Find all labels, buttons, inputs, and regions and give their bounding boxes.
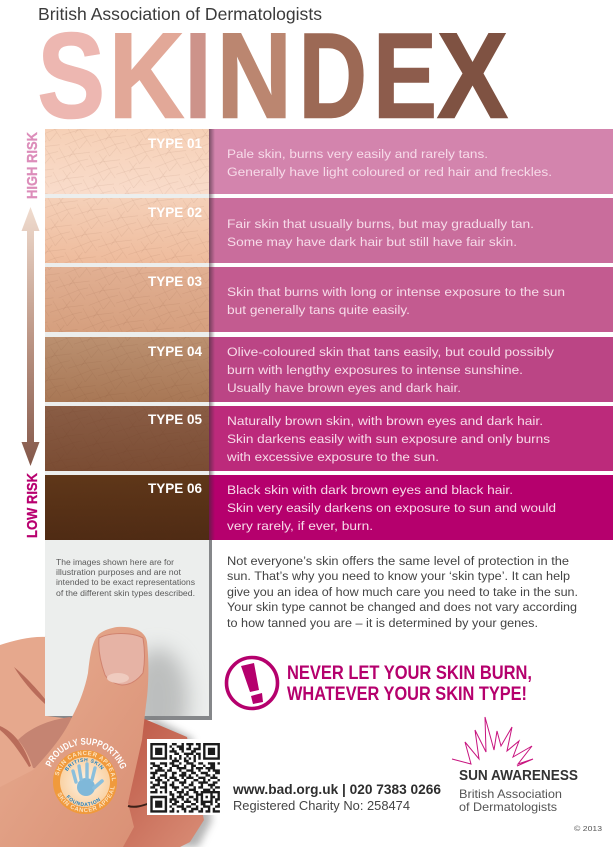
row: type 06: TYPE 06 — [148, 480, 202, 496]
card edge shadow — [209, 129, 215, 540]
badge: skin cancer appeal — [45, 738, 126, 814]
icon: blue handprint — [73, 764, 102, 796]
hand shadow — [150, 716, 212, 847]
logo: sun awareness: British Association — [459, 787, 562, 801]
crease between fingers — [128, 803, 150, 807]
row: type 04: Olive-coloured skin that tans easily, but could possibly — [227, 345, 555, 359]
explanatory paragraph — [227, 554, 578, 630]
QR code — [147, 739, 222, 815]
row: type 04: burn with lengthy exposures to intense sunshine. — [227, 363, 523, 377]
row: type 04: TYPE 04 — [148, 343, 202, 359]
logo: sun awareness — [452, 717, 578, 814]
explanatory paragraph: give you an idea of how much care you need to take in the sun. — [227, 585, 578, 599]
warning message: NEVER LET YOUR SKIN BURN, — [287, 663, 532, 684]
icon: exclamation warning — [226, 658, 278, 708]
row: type 01: TYPE 01 — [148, 135, 202, 151]
icon: sun rays — [452, 717, 533, 766]
badge: skin cancer appeal: FOUNDATION — [66, 794, 100, 806]
risk scale arrow — [22, 207, 40, 466]
title: SKINDEX — [38, 7, 508, 143]
row: type 05: Naturally brown skin, with brown eyes and dark hair. — [227, 414, 543, 428]
explanatory paragraph: sun. That’s why you need to know your ‘skin type’. It can help — [227, 569, 570, 583]
finger creases — [0, 667, 45, 767]
row: type 03: but generally tans quite easily. — [227, 303, 410, 317]
explanatory paragraph: to how tanned you are – it is determined by your genes. — [227, 616, 538, 630]
row: type 06: Black skin with dark brown eyes and black hair. — [227, 483, 513, 497]
high risk label: HIGH RISK — [24, 132, 41, 199]
contact details: Registered Charity No: 258474 — [233, 799, 410, 813]
title: SKINDEX: K — [109, 7, 184, 143]
lower finger — [18, 717, 85, 770]
row: type 03: TYPE 03 — [148, 273, 202, 289]
badge: skin cancer appeal: BRITISH SKIN — [64, 758, 104, 772]
row: type 06: Skin very easily darkens on exposure to sun and would — [227, 501, 556, 515]
title: SKINDEX: E — [373, 7, 437, 143]
thumb shadow on card — [144, 641, 196, 716]
warning message: WHATEVER YOUR SKIN TYPE! — [287, 684, 527, 705]
title: SKINDEX: N — [216, 7, 292, 143]
illustration disclaimer note — [56, 558, 195, 598]
title: SKINDEX: D — [298, 7, 367, 143]
held card — [45, 129, 212, 720]
back fingers — [100, 717, 204, 847]
row: type 04 — [45, 337, 613, 402]
row: type 02: Fair skin that usually burns, but may gradually tan. — [227, 217, 534, 231]
row: type 05: with excessive exposure to the sun. — [226, 450, 439, 464]
illustration disclaimer note: of the different skin types described. — [56, 589, 195, 598]
explanatory paragraph: Your skin type cannot be changed and does not vary according — [227, 600, 577, 614]
row: type 05: TYPE 05 — [148, 411, 202, 427]
row: type 05 — [45, 406, 613, 471]
title: SKINDEX: I — [184, 7, 212, 143]
contact details: www.bad.org.uk | 020 7383 0266 — [232, 781, 441, 797]
row: type 03 — [45, 267, 613, 332]
row: type 01 — [45, 129, 613, 194]
badge: skin cancer appeal: PROUDLY SUPPORTING — [45, 738, 126, 769]
low risk label: LOW RISK — [24, 473, 41, 538]
nail lunula — [107, 673, 129, 683]
thumbnail — [99, 634, 144, 685]
row: type 01: Generally have light coloured or red hair and freckles. — [227, 165, 552, 179]
logo: sun awareness: SUN AWARENESS — [459, 768, 578, 784]
row: type 02: Some may have dark hair but still have fair skin. — [227, 235, 517, 249]
left fingers — [0, 637, 80, 847]
explanatory paragraph: Not everyone’s skin offers the same level of protection in the — [227, 554, 569, 568]
warning message — [287, 663, 532, 705]
title: SKINDEX: S — [38, 7, 105, 143]
contact details — [232, 781, 441, 813]
copyright: © 2013 — [574, 824, 602, 833]
illustration disclaimer note: intended to be exact representations — [56, 578, 195, 587]
row: type 02 — [45, 198, 613, 263]
row: type 06: very rarely, if ever, burn. — [227, 519, 373, 533]
row: type 05: Skin darkens easily with sun exposure and only burns — [227, 432, 550, 446]
illustration disclaimer note: The images shown here are for — [56, 558, 174, 567]
organisation heading: British Association of Dermatologists — [38, 4, 322, 24]
illustration disclaimer note: illustration purposes and are not — [56, 568, 182, 577]
row: type 04: Usually have brown eyes and dark hair. — [227, 381, 461, 395]
illustration: hand holding card — [0, 627, 212, 847]
thumb and palm — [0, 627, 148, 847]
logo: sun awareness: of Dermatologists — [459, 800, 557, 814]
badge: skin cancer appeal: SKIN CANCER APPEAL — [55, 750, 116, 782]
row: type 06 — [45, 475, 613, 540]
badge: skin cancer appeal: SKIN CANCER APPEAL — [58, 786, 115, 812]
title: SKINDEX: X — [437, 7, 508, 143]
row: type 03: Skin that burns with long or intense exposure to the sun — [227, 285, 565, 299]
row: type 02: TYPE 02 — [148, 204, 202, 220]
card over fingers — [45, 637, 209, 716]
row: type 01: Pale skin, burns very easily and rarely tans. — [227, 147, 488, 161]
